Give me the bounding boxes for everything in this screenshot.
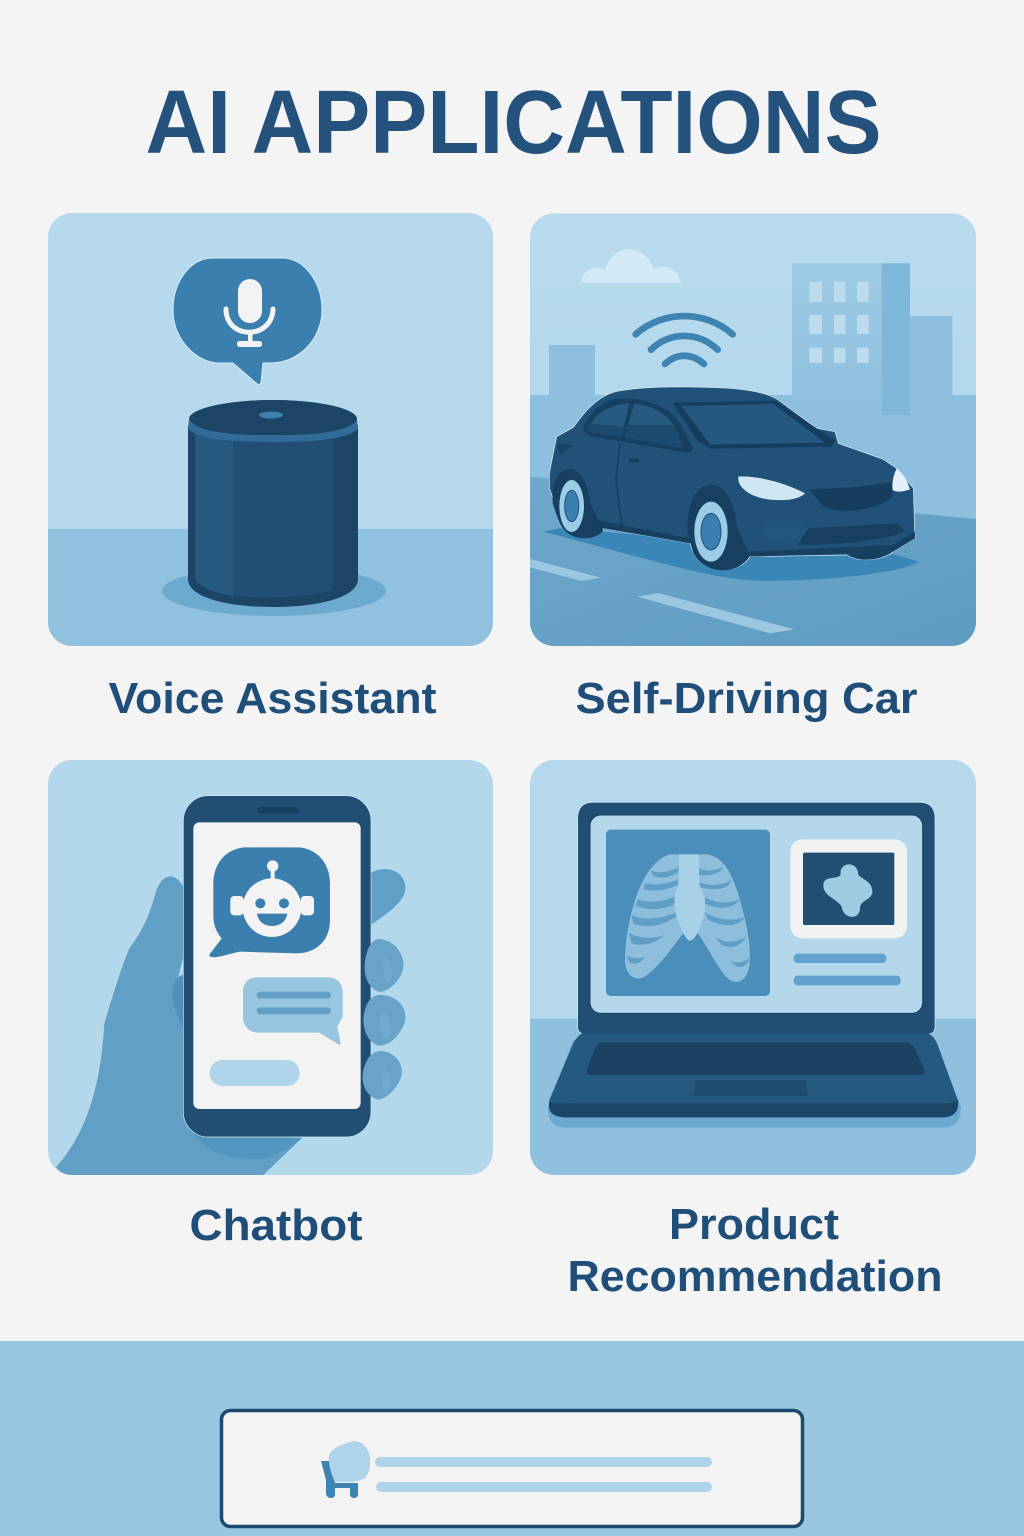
footer band bbox=[0, 1341, 1024, 1536]
icon: laptop bbox=[548, 802, 961, 1128]
icon: shopping cart bbox=[321, 1441, 370, 1498]
input field bbox=[210, 1060, 300, 1086]
reply bubble bbox=[243, 977, 343, 1045]
robot chat bubble bbox=[209, 847, 330, 957]
text lines bbox=[375, 1457, 712, 1467]
fingers bbox=[363, 939, 405, 1099]
label: product recommendation: Recommendation bbox=[568, 1252, 942, 1301]
road bbox=[530, 477, 976, 646]
hand bbox=[56, 877, 302, 1175]
icon: smartphone bbox=[183, 796, 371, 1137]
panel: chatbot bbox=[48, 760, 493, 1175]
cloud bbox=[581, 249, 681, 283]
windshield bbox=[673, 401, 836, 449]
front wheel bbox=[687, 485, 750, 570]
scan thumbnail bbox=[790, 839, 907, 938]
recommendation card bbox=[222, 1410, 802, 1526]
speaker shadow bbox=[162, 566, 386, 616]
headlights bbox=[738, 476, 805, 500]
label: self-driving car: Self-Driving Car bbox=[576, 674, 918, 723]
buildings bbox=[530, 263, 976, 519]
icon: microphone speech bubble bbox=[173, 258, 322, 384]
panel: product recommendation bbox=[530, 760, 976, 1175]
panel: self-driving car bbox=[530, 213, 976, 646]
icon: smart speaker bbox=[188, 400, 358, 607]
label: product recommendation: Product bbox=[669, 1200, 839, 1249]
side windows bbox=[583, 399, 693, 453]
panel: voice assistant bbox=[48, 213, 493, 646]
icon: car bbox=[549, 387, 915, 570]
grille bbox=[809, 482, 893, 511]
top finger bbox=[370, 869, 405, 925]
text lines bbox=[794, 954, 886, 963]
x-ray image bbox=[606, 830, 770, 996]
lower shading bbox=[595, 520, 690, 543]
car shadow bbox=[543, 528, 918, 581]
lane markings bbox=[530, 559, 601, 581]
label: product recommendation bbox=[568, 1200, 942, 1301]
title: AI APPLICATIONS bbox=[146, 73, 882, 173]
door line bbox=[616, 443, 622, 525]
rear light bbox=[557, 443, 573, 455]
label: chatbot: Chatbot bbox=[190, 1201, 363, 1250]
rear wheel bbox=[553, 469, 603, 538]
icon: wireless signal bbox=[636, 316, 733, 364]
label: voice assistant: Voice Assistant bbox=[108, 674, 437, 723]
